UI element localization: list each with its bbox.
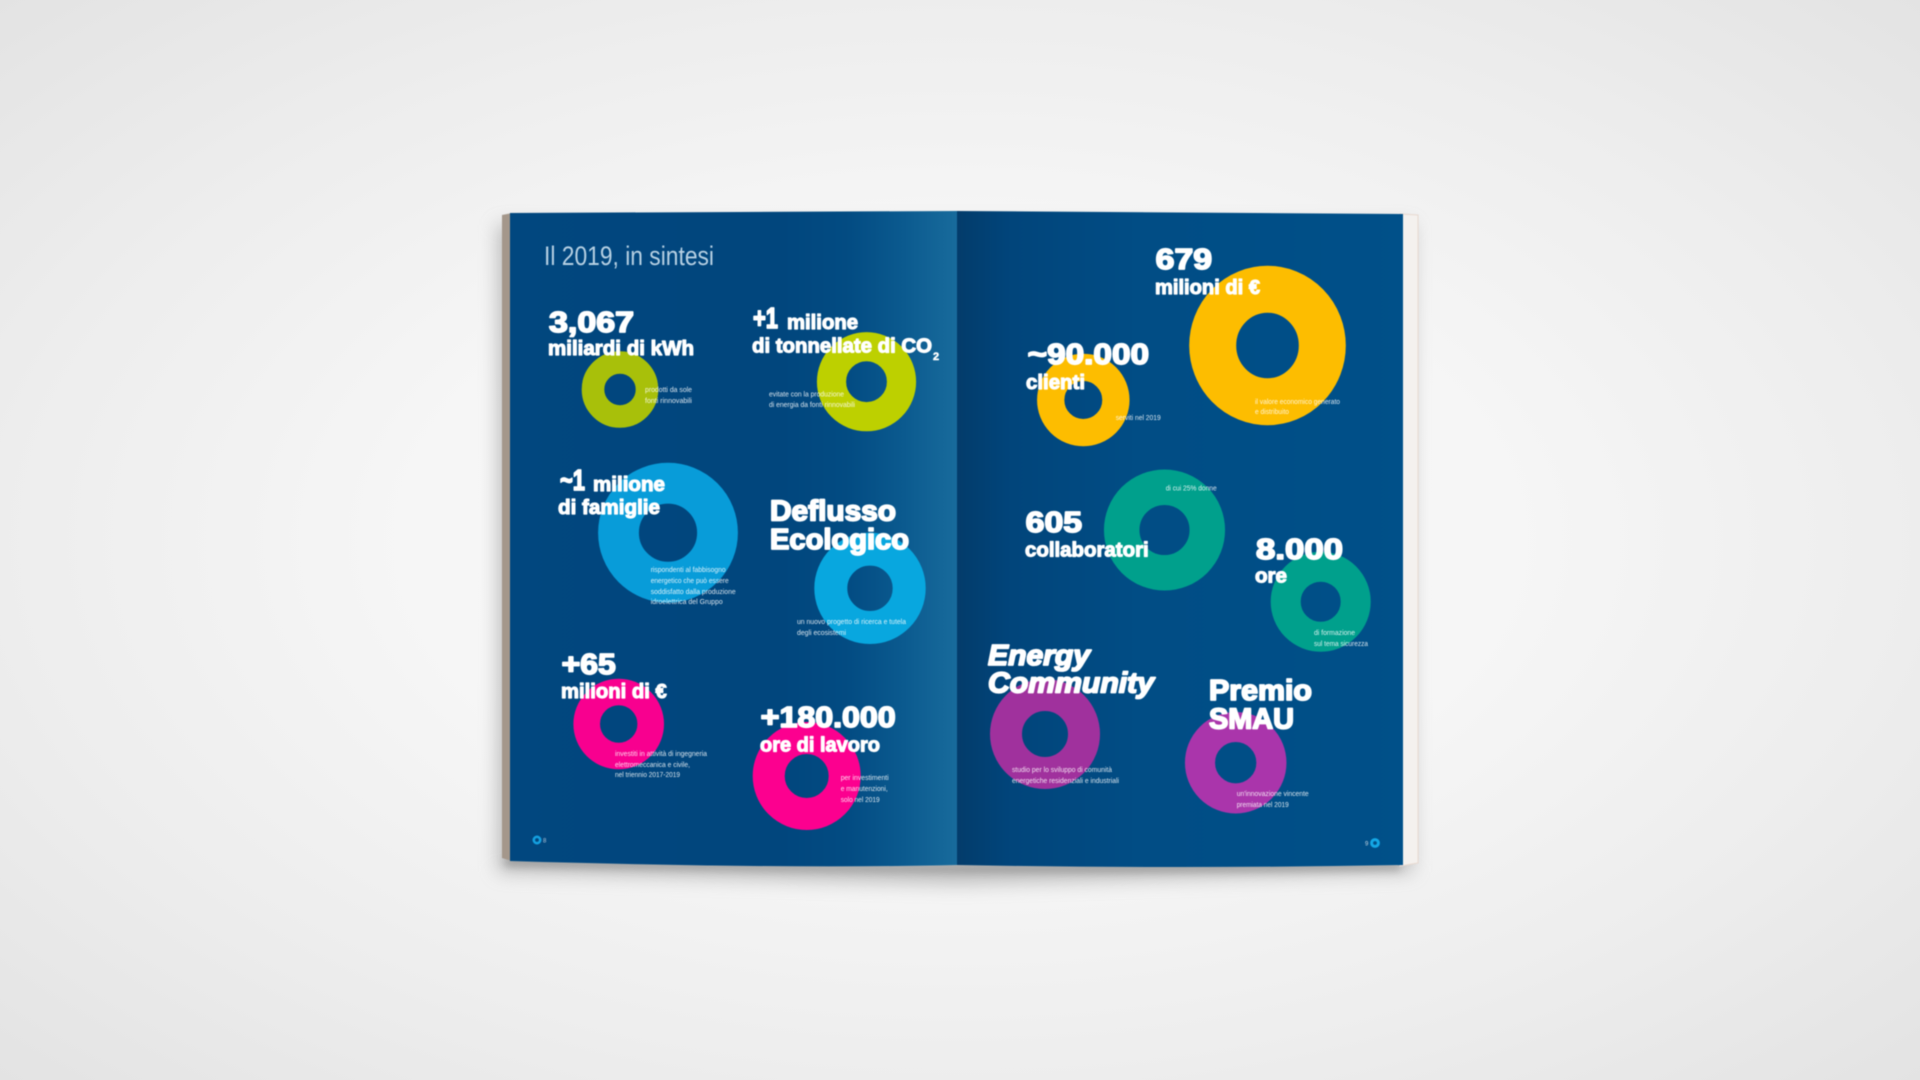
note: studio per lo sviluppo di comunità <box>1012 767 1112 774</box>
heading: 8.000 <box>1256 534 1343 566</box>
subheading: milioni di € <box>1155 277 1260 299</box>
panel: +65 milioni di € <box>561 649 707 779</box>
note: premiata nel 2019 <box>1237 802 1289 809</box>
right page edge <box>1400 214 1418 866</box>
title: Il 2019, in sintesi <box>544 241 714 271</box>
note: di formazione <box>1314 630 1355 637</box>
note: nel triennio 2017-2019 <box>615 772 680 779</box>
subheading: collaboratori <box>1025 540 1149 562</box>
donut <box>587 692 651 756</box>
panel: 605 collaboratori <box>1025 486 1217 573</box>
heading: ~1 <box>560 465 585 497</box>
note: e manutenzioni, <box>841 786 888 793</box>
note: un nuovo progetto di ricerca e tutela <box>797 619 906 626</box>
panel: ~1 milione di famiglie <box>558 465 736 606</box>
donut <box>1006 695 1084 773</box>
panel: Energy Community <box>988 640 1156 785</box>
heading: +65 <box>562 649 616 681</box>
subheading: di famiglie <box>558 497 660 519</box>
heading: 679 <box>1156 244 1212 276</box>
heading: +180.000 <box>761 702 896 734</box>
subheading: milione <box>787 312 858 334</box>
note: idroelettrica del Gruppo <box>651 599 723 606</box>
subheading: ore <box>1255 566 1287 588</box>
panel: +180.000 ore di lavoro <box>760 702 896 814</box>
note: fonti rinnovabili <box>645 398 692 405</box>
icon: page ring <box>534 837 540 843</box>
donut <box>618 483 718 582</box>
heading: Premio <box>1209 675 1312 707</box>
note: il valore economico generato <box>1255 399 1340 406</box>
subscript: 2 <box>933 351 939 363</box>
panel: Deflusso Ecologico <box>770 496 909 637</box>
subheading: di tonnellate di CO <box>752 336 932 358</box>
heading: Energy <box>988 640 1092 672</box>
heading: Community <box>988 668 1156 700</box>
donut <box>1286 567 1356 637</box>
panel: 8.000 ore <box>1255 534 1368 648</box>
donut <box>831 549 909 628</box>
note: e distribuito <box>1255 409 1289 416</box>
panel: +1 milione di tonnellate <box>752 303 939 417</box>
donut <box>1200 727 1271 798</box>
note: evitate con la produzione <box>769 392 844 399</box>
donut <box>1051 367 1116 433</box>
left page edge <box>502 213 512 861</box>
subheading: clienti <box>1026 372 1085 394</box>
page number left <box>534 837 547 844</box>
heading: Ecologico <box>770 524 909 556</box>
right page <box>957 211 1403 867</box>
panel: Premio SMAU <box>1200 675 1312 809</box>
subheading: miliardi di kWh <box>548 338 694 360</box>
note: di energia da fonti rinnovabili <box>769 402 855 409</box>
heading: ~90.000 <box>1028 339 1149 371</box>
note: energetico che può essere <box>651 578 729 585</box>
donut <box>1213 289 1322 402</box>
subheading: ore di lavoro <box>760 735 880 757</box>
donut <box>593 362 647 416</box>
icon: page ring <box>1372 840 1378 846</box>
donut <box>1122 487 1207 573</box>
note: energetiche residenziali e industriali <box>1012 778 1119 785</box>
donut <box>769 738 845 814</box>
panel: 3,067 miliardi di kWh <box>548 307 694 416</box>
note: serviti nel 2019 <box>1116 415 1161 422</box>
number: 8 <box>543 838 547 844</box>
panel: 679 milioni di € <box>1155 244 1340 416</box>
book <box>502 211 1418 867</box>
heading: 3,067 <box>549 307 634 339</box>
note: per investimenti <box>841 775 889 782</box>
book shadow <box>498 225 1412 884</box>
note: degli ecosistemi <box>797 630 846 637</box>
subheading: milioni di € <box>561 681 667 703</box>
heading: +1 <box>753 303 778 335</box>
heading: SMAU <box>1209 704 1294 736</box>
book contact shadow <box>505 858 1400 872</box>
number: 9 <box>1365 842 1369 848</box>
note: soddisfatto dalla produzione <box>651 589 736 596</box>
note: investiti in attività di ingegneria <box>615 751 707 758</box>
note: rispondenti al fabbisogno <box>651 567 726 574</box>
note: prodotti da sole <box>645 387 692 394</box>
note: un'innovazione vincente <box>1237 791 1309 798</box>
page number right <box>1365 840 1378 848</box>
panel: ~90.000 clienti <box>1026 339 1161 433</box>
heading: 605 <box>1026 507 1082 539</box>
note: sul tema sicurezza <box>1314 641 1368 648</box>
note: elettromeccanica e civile, <box>615 762 690 769</box>
heading: Deflusso <box>770 496 896 528</box>
note: solo nel 2019 <box>841 797 880 804</box>
donut <box>832 347 902 417</box>
note: di cui 25% donne <box>1166 486 1217 493</box>
subheading: milione <box>593 474 665 496</box>
left page <box>510 211 957 866</box>
